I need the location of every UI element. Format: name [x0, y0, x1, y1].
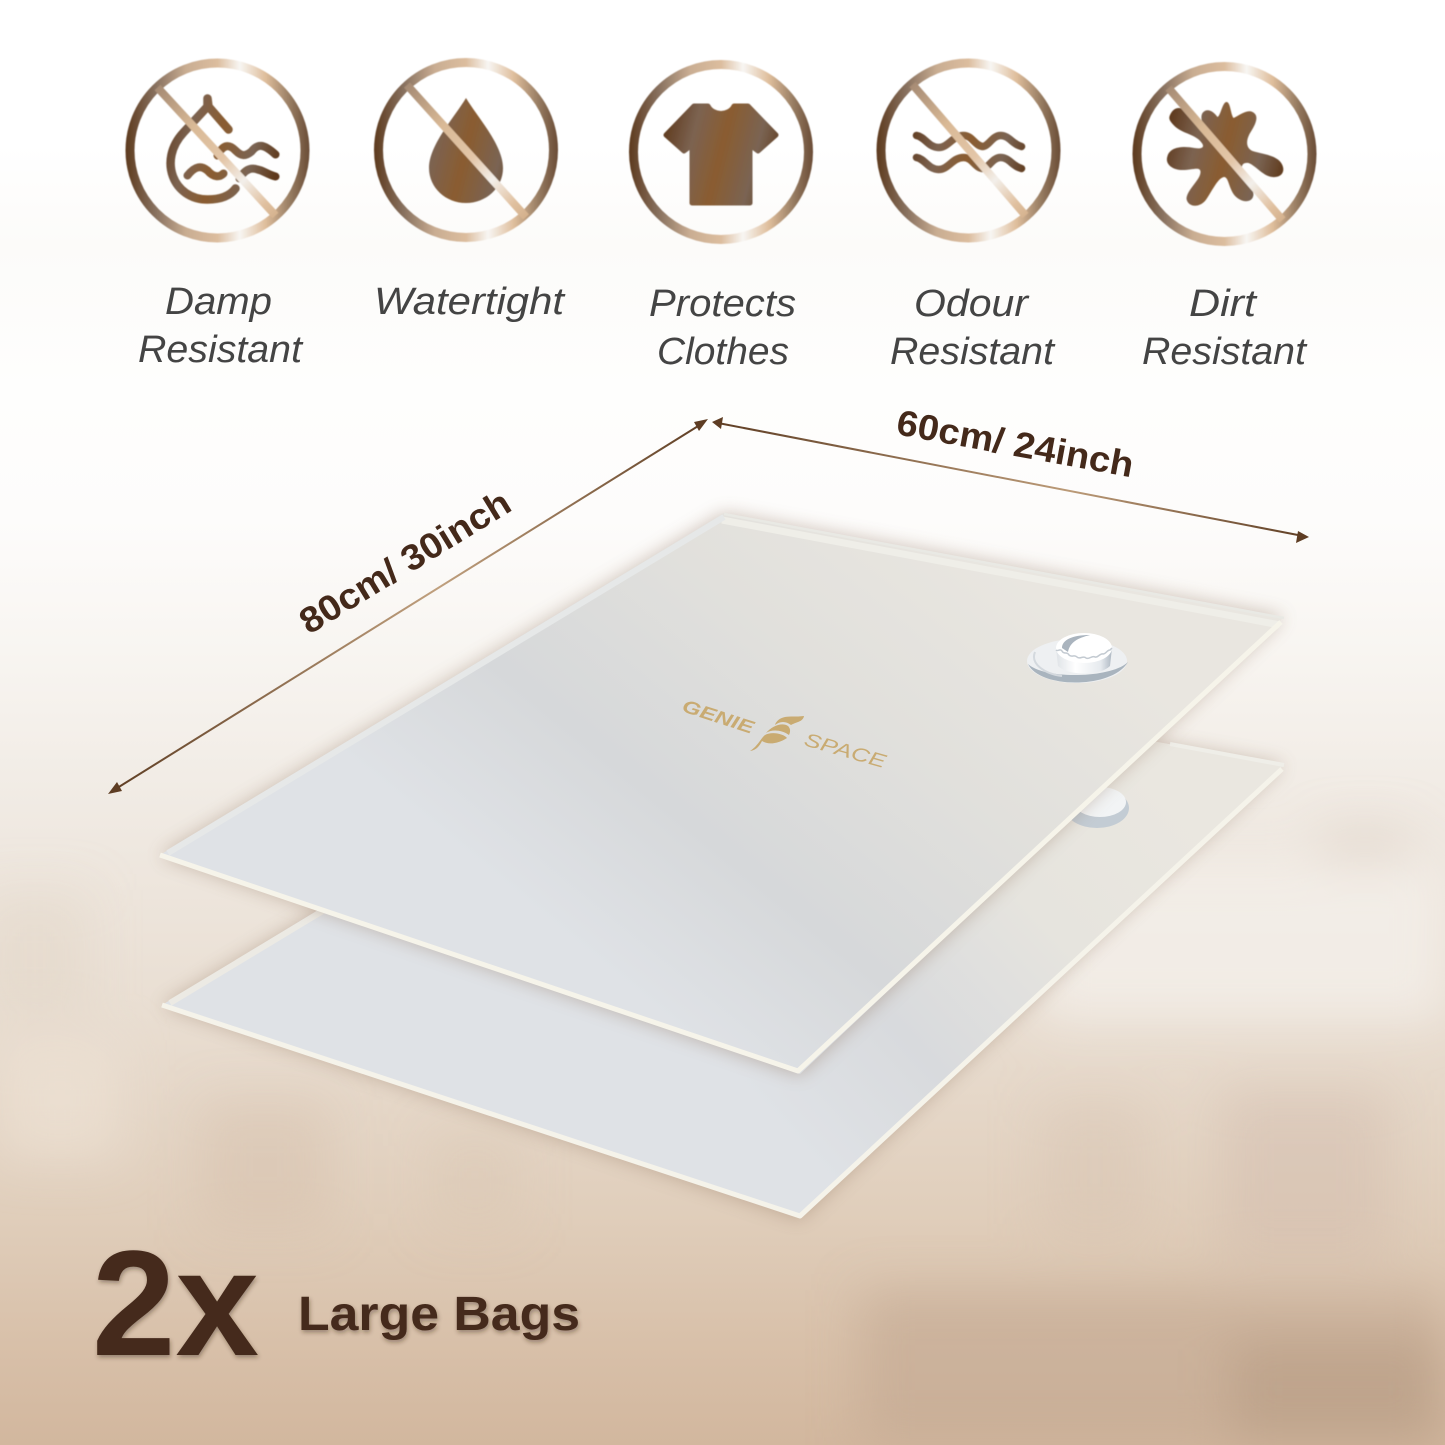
valve: upper	[1027, 633, 1128, 683]
icon: no damp	[130, 63, 305, 238]
icon: no water drop	[378, 62, 554, 238]
heading: 2x: 2x	[92, 1219, 259, 1387]
heading: Large Bags: Large Bags	[298, 1288, 580, 1341]
label: Odour Resistant: Resistant	[890, 331, 1055, 373]
label: Damp Resistant: Damp	[165, 281, 272, 323]
logo: Genie Space	[680, 696, 889, 773]
label: Dirt Resistant: Dirt	[1189, 283, 1258, 325]
logo: Genie Space: SPACE	[802, 730, 889, 773]
upper bag	[160, 513, 1284, 1075]
label: Dirt Resistant: Resistant	[1142, 331, 1307, 373]
arrow: width dimension	[712, 417, 1309, 543]
valve: lower	[1065, 787, 1129, 828]
label: Protects Clothes: Protects	[649, 283, 796, 325]
lower bag	[162, 663, 1284, 1219]
label: Odour Resistant: Odour	[914, 283, 1029, 325]
icon: no odour	[881, 63, 1056, 238]
icon: t-shirt	[634, 64, 808, 240]
label: Protects Clothes: Clothes	[657, 331, 789, 373]
icon: no dirt splat	[1137, 66, 1312, 242]
dimension label: 80cm/ 30inch: 80cm/ 30inch	[292, 481, 518, 642]
dimension label: 60cm/ 24inch: 60cm/ 24inch	[894, 402, 1137, 485]
arrow: length dimension	[108, 419, 708, 794]
logo: Genie Space: GENIE	[680, 696, 758, 738]
label: Damp Resistant: Resistant	[138, 329, 303, 371]
label: Watertight: Watertight	[374, 281, 566, 323]
